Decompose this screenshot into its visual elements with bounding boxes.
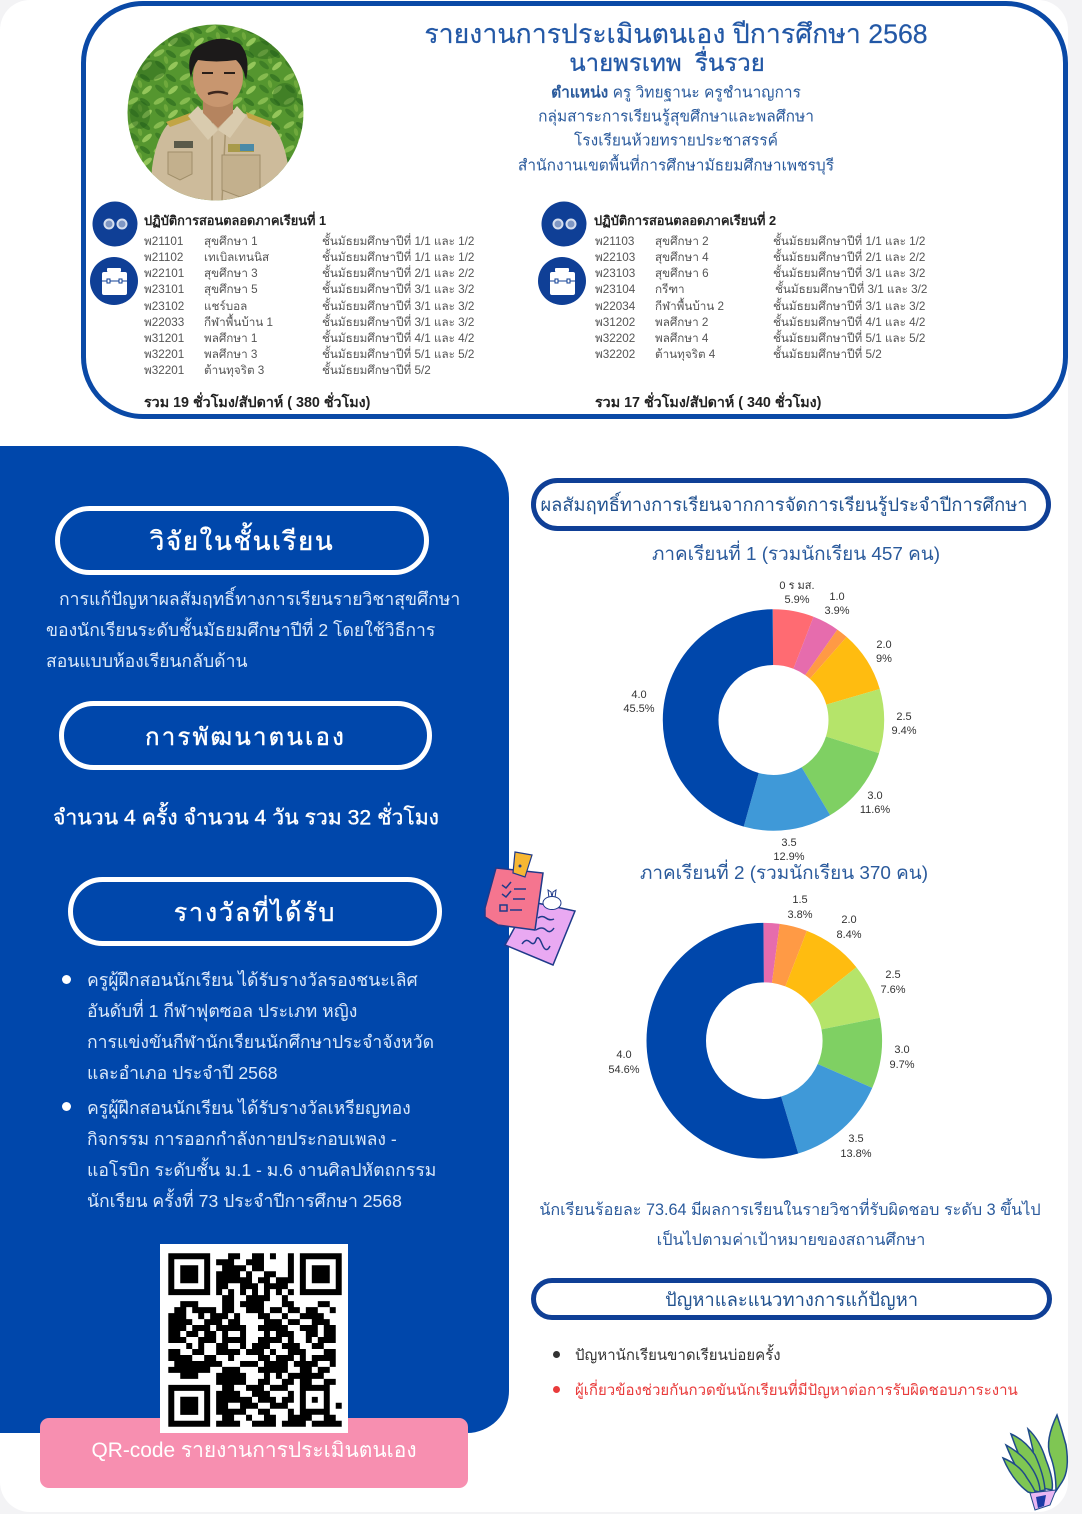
- text: achievement summary: เป็นไปตามค่าเป้าหมายของสถานศึกษา: [657, 1231, 925, 1249]
- table: semester 2 courses: ชั้นมัธยมศึกษาปีที่ 5/2: [773, 348, 882, 361]
- table: semester 1 courses: ชั้นมัธยมศึกษาปีที่ 5/1 และ 5/2: [322, 348, 474, 361]
- list: awards: ครูผู้ฝึกสอนนักเรียน ได้รับรางวัลรองชนะเลิศ: [87, 970, 418, 990]
- table: semester 1 courses: ชั้นมัธยมศึกษาปีที่ 3/1 และ 3/2: [322, 316, 474, 329]
- table: semester 2 courses: พลศึกษา 4: [655, 332, 708, 345]
- text: achievement summary: [539, 1198, 1041, 1249]
- donut chart: semester 1 grades: 3.0: [867, 790, 883, 802]
- icon: glasses semester 2: [542, 202, 586, 246]
- table: semester 1 courses: พลศึกษา 1: [204, 332, 257, 345]
- table: semester 1 courses: [144, 232, 474, 377]
- panel: left blue column: [0, 446, 509, 1433]
- sticker: plant: [1002, 1413, 1068, 1511]
- heading pill: problems and solutions: ปัญหาและแนวทางการแก้ปัญหา: [665, 1288, 918, 1310]
- table: semester 1 courses: ต้านทุจริต 3: [204, 364, 264, 377]
- text: research description: ของนักเรียนระดับชั้นมัธยมศึกษาปีที่ 2 โดยใช้วิธีการ: [46, 620, 435, 640]
- table: semester 1 courses: พ21102: [144, 251, 183, 264]
- table: semester 1 courses: ชั้นมัธยมศึกษาปีที่ 3/1 และ 3/2: [322, 300, 474, 313]
- table: semester 1 courses: แชร์บอล: [204, 300, 247, 313]
- table: semester 2 courses: พ31202: [595, 316, 635, 329]
- total hours semester 2: รวม 17 ชั่วโมง/สัปดาห์ ( 340 ชั่วโมง): [595, 395, 821, 411]
- list: awards: ครูผู้ฝึกสอนนักเรียน ได้รับรางวัลเหรียญทอง: [87, 1098, 411, 1118]
- position and affiliation: สำนักงานเขตพื้นที่การศึกษามัธยมศึกษาเพชรบุรี: [518, 157, 834, 174]
- table: semester 1 courses: พ23101: [144, 283, 184, 296]
- table: semester 2 courses: ชั้นมัธยมศึกษาปีที่ 3/1 และ 3/2: [773, 300, 925, 313]
- donut chart: semester 1 grades: 4.0: [631, 689, 647, 701]
- donut chart: semester 2 grades: 3.0: [894, 1044, 910, 1056]
- donut chart: semester 2 grades: 2.0: [841, 914, 857, 926]
- table: semester 1 courses: ชั้นมัธยมศึกษาปีที่ 1/1 และ 1/2: [322, 251, 474, 264]
- table: semester 1 courses: พ32201: [144, 364, 184, 377]
- heading pill: self development: การพัฒนาตนเอง: [145, 724, 346, 751]
- table: semester 1 courses: สุขศึกษา 5: [204, 283, 258, 296]
- heading pill: self development: [59, 701, 432, 770]
- table: semester 1 courses: ชั้นมัธยมศึกษาปีที่ 1/1 และ 1/2: [322, 235, 474, 248]
- teacher name: นายพรเทพ รื่นรวย: [569, 50, 765, 77]
- list: awards: [62, 970, 436, 1211]
- table: semester 2 courses: สุขศึกษา 4: [655, 251, 709, 264]
- donut chart: semester 2 grades: 3.5: [848, 1133, 864, 1145]
- donut chart: semester 1 grades: 3.5: [781, 837, 797, 849]
- list: awards: อันดับที่ 1 กีฬาฟุตซอล ประเภท หญิง: [87, 1001, 357, 1021]
- heading: semester 2 teaching: ปฏิบัติการสอนตลอดภาคเรียนที่ 2: [594, 213, 776, 228]
- table: semester 2 courses: ชั้นมัธยมศึกษาปีที่ 2/1 และ 2/2: [773, 251, 925, 264]
- donut chart: semester 1 grades: 5.9%: [784, 594, 810, 606]
- text: achievement summary: นักเรียนร้อยละ 73.64 มีผลการเรียนในรายวิชาที่รับผิดชอบ ระดับ 3 ขึ้นไป: [539, 1201, 1041, 1219]
- list: awards: การแข่งขันกีฬานักเรียนนักศึกษาประจำจังหวัด: [87, 1032, 434, 1052]
- heading pill: classroom research: วิจัยในชั้นเรียน: [150, 526, 334, 556]
- QR-code caption bar: [40, 1418, 468, 1488]
- table: semester 2 courses: สุขศึกษา 6: [655, 267, 709, 280]
- text: development summary: จำนวน 4 ครั้ง จำนวน 4 วัน รวม 32 ชั่วโมง: [53, 807, 439, 830]
- table: semester 2 courses: สุขศึกษา 2: [655, 235, 709, 248]
- table: semester 1 courses: กีฬาพื้นบ้าน 1: [204, 316, 273, 329]
- donut chart: semester 1 grades: 45.5%: [623, 703, 655, 715]
- donut chart: semester 1 grades: [623, 580, 917, 863]
- donut chart: semester 2 grades: 54.6%: [608, 1064, 640, 1076]
- donut chart: semester 2 grades: 2.5: [885, 969, 901, 981]
- donut chart: semester 1 grades: 2.5: [896, 711, 912, 723]
- donut chart: semester 2 grades: [608, 894, 915, 1160]
- donut chart: semester 2 grades: 9.7%: [889, 1059, 915, 1071]
- table: semester 2 courses: ชั้นมัธยมศึกษาปีที่ 4/1 และ 4/2: [773, 316, 925, 329]
- heading pill: learning achievement: ผลสัมฤทธิ์ทางการเรียนจากการจัดการเรียนรู้ประจำปีการศึกษา: [540, 494, 1028, 515]
- heading: semester 1 teaching: ปฏิบัติการสอนตลอดภาคเรียนที่ 1: [144, 213, 326, 228]
- donut chart: semester 1 grades: 3.9%: [824, 605, 850, 617]
- list: problems: ผู้เกี่ยวข้องช่วยกันกวดขันนักเรียนที่มีปัญหาต่อการรับผิดชอบภาระงาน: [575, 1382, 1018, 1399]
- profile photo: [128, 24, 304, 200]
- table: semester 2 courses: ชั้นมัธยมศึกษาปีที่ 1/1 และ 1/2: [773, 235, 925, 248]
- heading: semester 2 chart: ภาคเรียนที่ 2 (รวมนักเรียน 370 คน): [640, 863, 928, 884]
- table: semester 2 courses: ชั้นมัธยมศึกษาปีที่ 5/1 และ 5/2: [773, 332, 925, 345]
- heading pill: awards: รางวัลที่ได้รับ: [174, 898, 336, 926]
- table: semester 1 courses: สุขศึกษา 3: [204, 267, 258, 280]
- table: semester 1 courses: พ32201: [144, 348, 184, 361]
- sticker: sticky notes: [484, 851, 576, 966]
- donut chart: semester 2 grades: 13.8%: [840, 1148, 872, 1160]
- table: semester 2 courses: พ23104: [595, 283, 635, 296]
- donut chart: semester 1 grades: 11.6%: [860, 804, 890, 816]
- position and affiliation: [518, 84, 834, 175]
- heading pill: awards: [68, 877, 442, 946]
- text: research description: [46, 586, 460, 671]
- text: research description: การแก้ปัญหาผลสัมฤทธิ์ทางการเรียนรายวิชาสุขศึกษา: [59, 589, 460, 609]
- donut chart: semester 1 grades: 9.4%: [891, 725, 917, 737]
- table: semester 1 courses: เทเบิลเทนนิส: [204, 251, 269, 264]
- icon: glasses semester 1: [92, 202, 138, 246]
- list: awards: นักเรียน ครั้งที่ 73 ประจำปีการศึกษา 2568: [87, 1191, 402, 1211]
- table: semester 2 courses: ชั้นมัธยมศึกษาปีที่ 3/1 และ 3/2: [775, 283, 927, 296]
- table: semester 2 courses: กรีฑา: [655, 283, 685, 296]
- list: awards: แอโรบิก ระดับชั้น ม.1 - ม.6 งานศิลปหัตถกรรม: [87, 1160, 436, 1180]
- table: semester 1 courses: พลศึกษา 3: [204, 348, 257, 361]
- table: semester 1 courses: พ23102: [144, 300, 184, 313]
- donut chart: semester 2 grades: 8.4%: [836, 929, 862, 941]
- list: problems: [553, 1344, 1018, 1399]
- table: semester 1 courses: พ22033: [144, 316, 184, 329]
- donut chart: semester 2 grades: 4.0: [616, 1049, 632, 1061]
- QR code: [160, 1244, 348, 1433]
- table: semester 1 courses: พ21101: [144, 235, 183, 248]
- heading pill: problems and solutions: [531, 1278, 1052, 1320]
- table: semester 1 courses: ชั้นมัธยมศึกษาปีที่ 5/2: [322, 364, 431, 377]
- table: semester 2 courses: พลศึกษา 2: [655, 316, 708, 329]
- QR-code caption bar: QR-code รายงานการประเมินตนเอง: [91, 1439, 417, 1462]
- donut chart: semester 2 grades: 1.5: [792, 894, 808, 906]
- table: semester 2 courses: ชั้นมัธยมศึกษาปีที่ 3/1 และ 3/2: [773, 267, 925, 280]
- heading pill: classroom research: [55, 506, 429, 575]
- donut chart: semester 1 grades: 1.0: [829, 591, 845, 603]
- neck and head: [203, 101, 233, 128]
- position and affiliation: กลุ่มสาระการเรียนรู้สุขศึกษาและพลศึกษา: [538, 108, 814, 125]
- list: awards: กิจกรรม การออกกำลังกายประกอบเพลง -: [87, 1129, 397, 1149]
- table: semester 2 courses: พ22103: [595, 251, 635, 264]
- title: รายงานการประเมินตนเอง ปีการศึกษา 2568: [424, 19, 928, 49]
- icon: briefcase semester 2: [538, 257, 586, 305]
- donut chart: semester 1 grades: 12.9%: [773, 851, 805, 863]
- list: awards: และอำเภอ ประจำปี 2568: [87, 1063, 278, 1083]
- panel: teacher profile header: [81, 1, 1068, 419]
- table: semester 2 courses: พ32202: [595, 348, 635, 361]
- table: semester 1 courses: ชั้นมัธยมศึกษาปีที่ 3/1 และ 3/2: [322, 283, 474, 296]
- table: semester 1 courses: ชั้นมัธยมศึกษาปีที่ 2/1 และ 2/2: [322, 267, 474, 280]
- position and affiliation: โรงเรียนห้วยทรายประชาสรรค์: [574, 132, 778, 149]
- table: semester 2 courses: พ32202: [595, 332, 635, 345]
- table: semester 1 courses: สุขศึกษา 1: [204, 235, 258, 248]
- donut chart: semester 2 grades: 3.8%: [787, 909, 813, 921]
- table: semester 2 courses: กีฬาพื้นบ้าน 2: [655, 300, 724, 313]
- donut chart: semester 1 grades: 2.0: [876, 639, 892, 651]
- table: semester 1 courses: ชั้นมัธยมศึกษาปีที่ 4/1 และ 4/2: [322, 332, 474, 345]
- icon: briefcase semester 1: [90, 257, 138, 305]
- donut chart: semester 2 grades: 7.6%: [880, 984, 906, 996]
- donut chart: semester 1 grades: 9%: [876, 653, 892, 665]
- heading: semester 1 chart: ภาคเรียนที่ 1 (รวมนักเรียน 457 คน): [652, 544, 940, 565]
- total hours semester 1: รวม 19 ชั่วโมง/สัปดาห์ ( 380 ชั่วโมง): [144, 395, 370, 411]
- table: semester 2 courses: พ23103: [595, 267, 635, 280]
- heading pill: learning achievement: [531, 478, 1051, 531]
- text: research description: สอนแบบห้องเรียนกลับด้าน: [46, 651, 248, 671]
- table: semester 2 courses: ต้านทุจริต 4: [655, 348, 715, 361]
- shirt: [150, 110, 290, 201]
- table: semester 2 courses: พ22034: [595, 300, 635, 313]
- table: semester 1 courses: พ31201: [144, 332, 184, 345]
- table: semester 2 courses: พ21103: [595, 235, 634, 248]
- position and affiliation: ตำแหน่ง ครู วิทยฐานะ ครูชำนาญการ: [551, 84, 801, 101]
- table: semester 1 courses: พ22101: [144, 267, 184, 280]
- table: semester 2 courses: [595, 232, 927, 361]
- list: problems: ปัญหานักเรียนขาดเรียนบ่อยครั้ง: [575, 1347, 781, 1364]
- donut chart: semester 1 grades: 0 ร มส.: [779, 580, 815, 592]
